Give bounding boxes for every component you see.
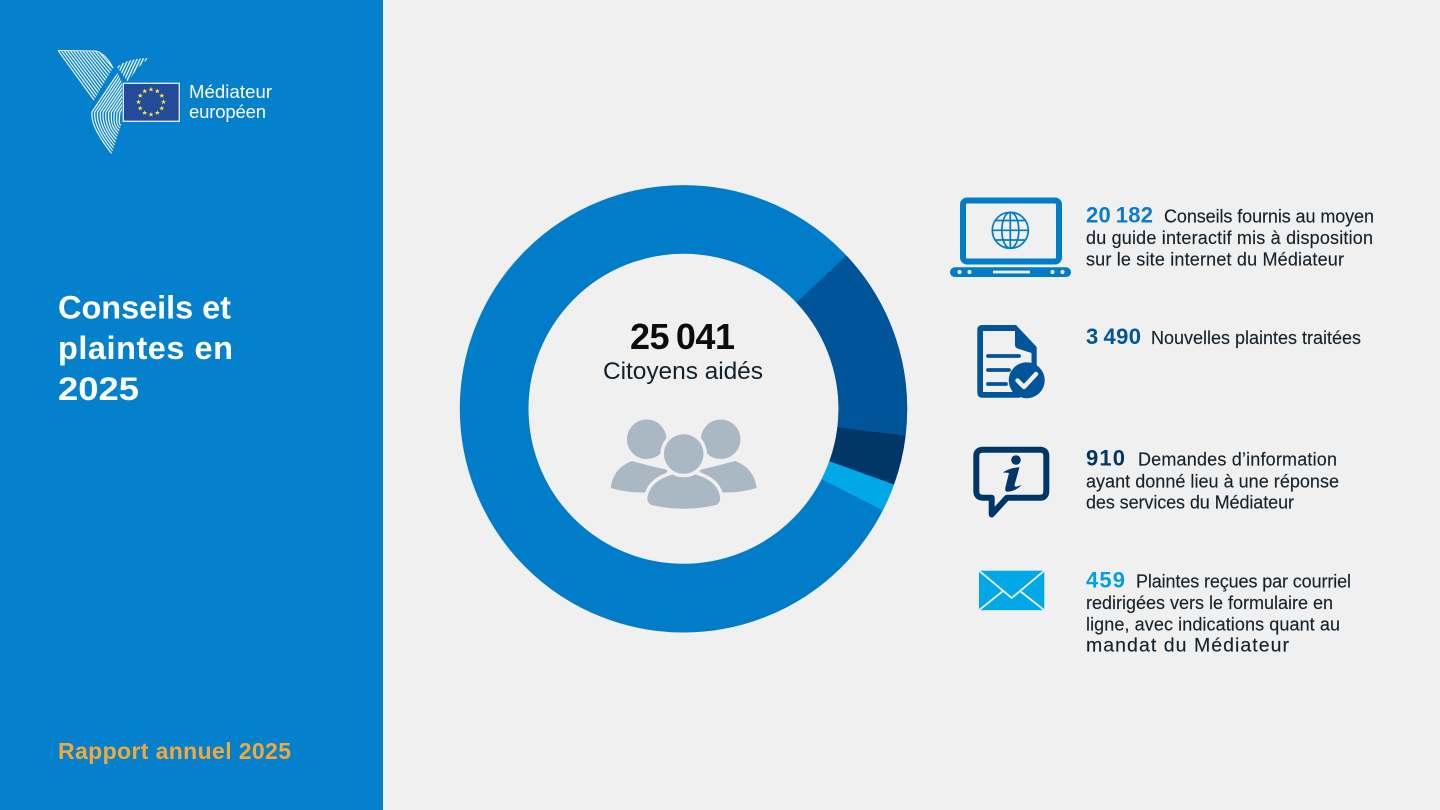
icon: group of citizens	[611, 418, 757, 510]
text: online advice description: du guide interactif mis à disposition	[1086, 228, 1373, 248]
segment: redirected complaints	[822, 461, 894, 510]
text: online advice description	[1086, 207, 1374, 270]
segment: information requests	[829, 427, 906, 485]
text: information requests description: ayant donné lieu à une réponse	[1086, 472, 1339, 492]
heading: panel title: plaintes en	[58, 330, 233, 366]
heading: panel title	[58, 289, 233, 407]
text: redirected complaints description	[1086, 572, 1351, 657]
icon: laptop with globe	[950, 200, 1071, 277]
segment: new complaints	[796, 256, 907, 436]
item: information requests	[976, 446, 1339, 514]
text: redirected complaints description: ligne, avec indications quant au	[1086, 614, 1340, 634]
item: new complaints handled: 3 490	[1086, 324, 1141, 349]
logo: European Ombudsman: Médiateur	[189, 81, 272, 102]
text: online advice description: sur le site internet du Médiateur	[1086, 250, 1344, 270]
donut centre total: Citoyens aidés	[603, 358, 763, 385]
text: information requests description: des services du Médiateur	[1086, 492, 1294, 512]
item: online advice	[950, 200, 1374, 277]
donut centre total	[603, 316, 763, 385]
heading: panel title: Conseils et	[58, 289, 231, 325]
text: redirected complaints description: mandat du Médiateur	[1086, 635, 1290, 657]
text: information requests description: Demandes d’information	[1138, 450, 1337, 470]
footer: annual report label: Rapport annuel 2025	[58, 738, 291, 764]
icon: document with check	[977, 325, 1045, 398]
item: information requests: 910	[1086, 446, 1125, 471]
item: online advice: 20 182	[1086, 203, 1153, 228]
panel: left sidebar	[0, 0, 383, 810]
logo: European Ombudsman	[58, 50, 272, 154]
text: information requests description	[1086, 450, 1339, 512]
text: online advice description: Conseils fournis au moyen	[1164, 207, 1374, 227]
icon: envelope	[979, 571, 1044, 610]
donut chart	[494, 219, 907, 598]
text: redirected complaints description: redirigées vers le formulaire en	[1086, 593, 1333, 613]
item: redirected complaints	[979, 568, 1351, 657]
text: new complaints description: Nouvelles plaintes traitées	[1151, 328, 1361, 348]
item: new complaints handled	[977, 324, 1361, 398]
text: redirected complaints description: Plaintes reçues par courriel	[1136, 572, 1351, 592]
logo: European Ombudsman: européen	[189, 101, 266, 122]
donut centre total: 25 041	[630, 316, 735, 357]
item: redirected complaints: 459	[1086, 568, 1125, 592]
heading: panel title: 2025	[58, 371, 139, 407]
icon: info speech bubble	[976, 450, 1046, 514]
